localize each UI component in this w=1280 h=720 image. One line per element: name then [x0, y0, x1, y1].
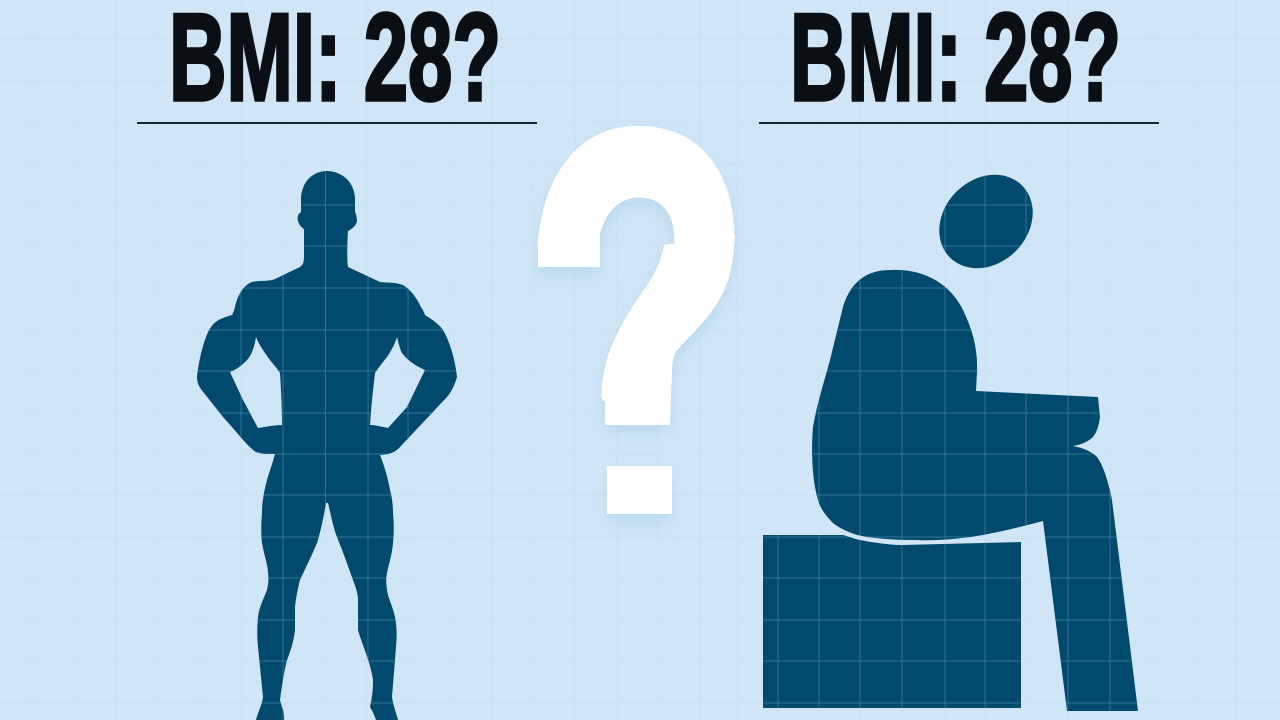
- infographic canvas: [137, 11, 1159, 720]
- icon: muscular man silhouette: [197, 171, 457, 720]
- icon: seated person silhouette on box: [763, 174, 1138, 711]
- central question mark: [536, 126, 736, 524]
- central question mark: ?: [525, 21, 751, 621]
